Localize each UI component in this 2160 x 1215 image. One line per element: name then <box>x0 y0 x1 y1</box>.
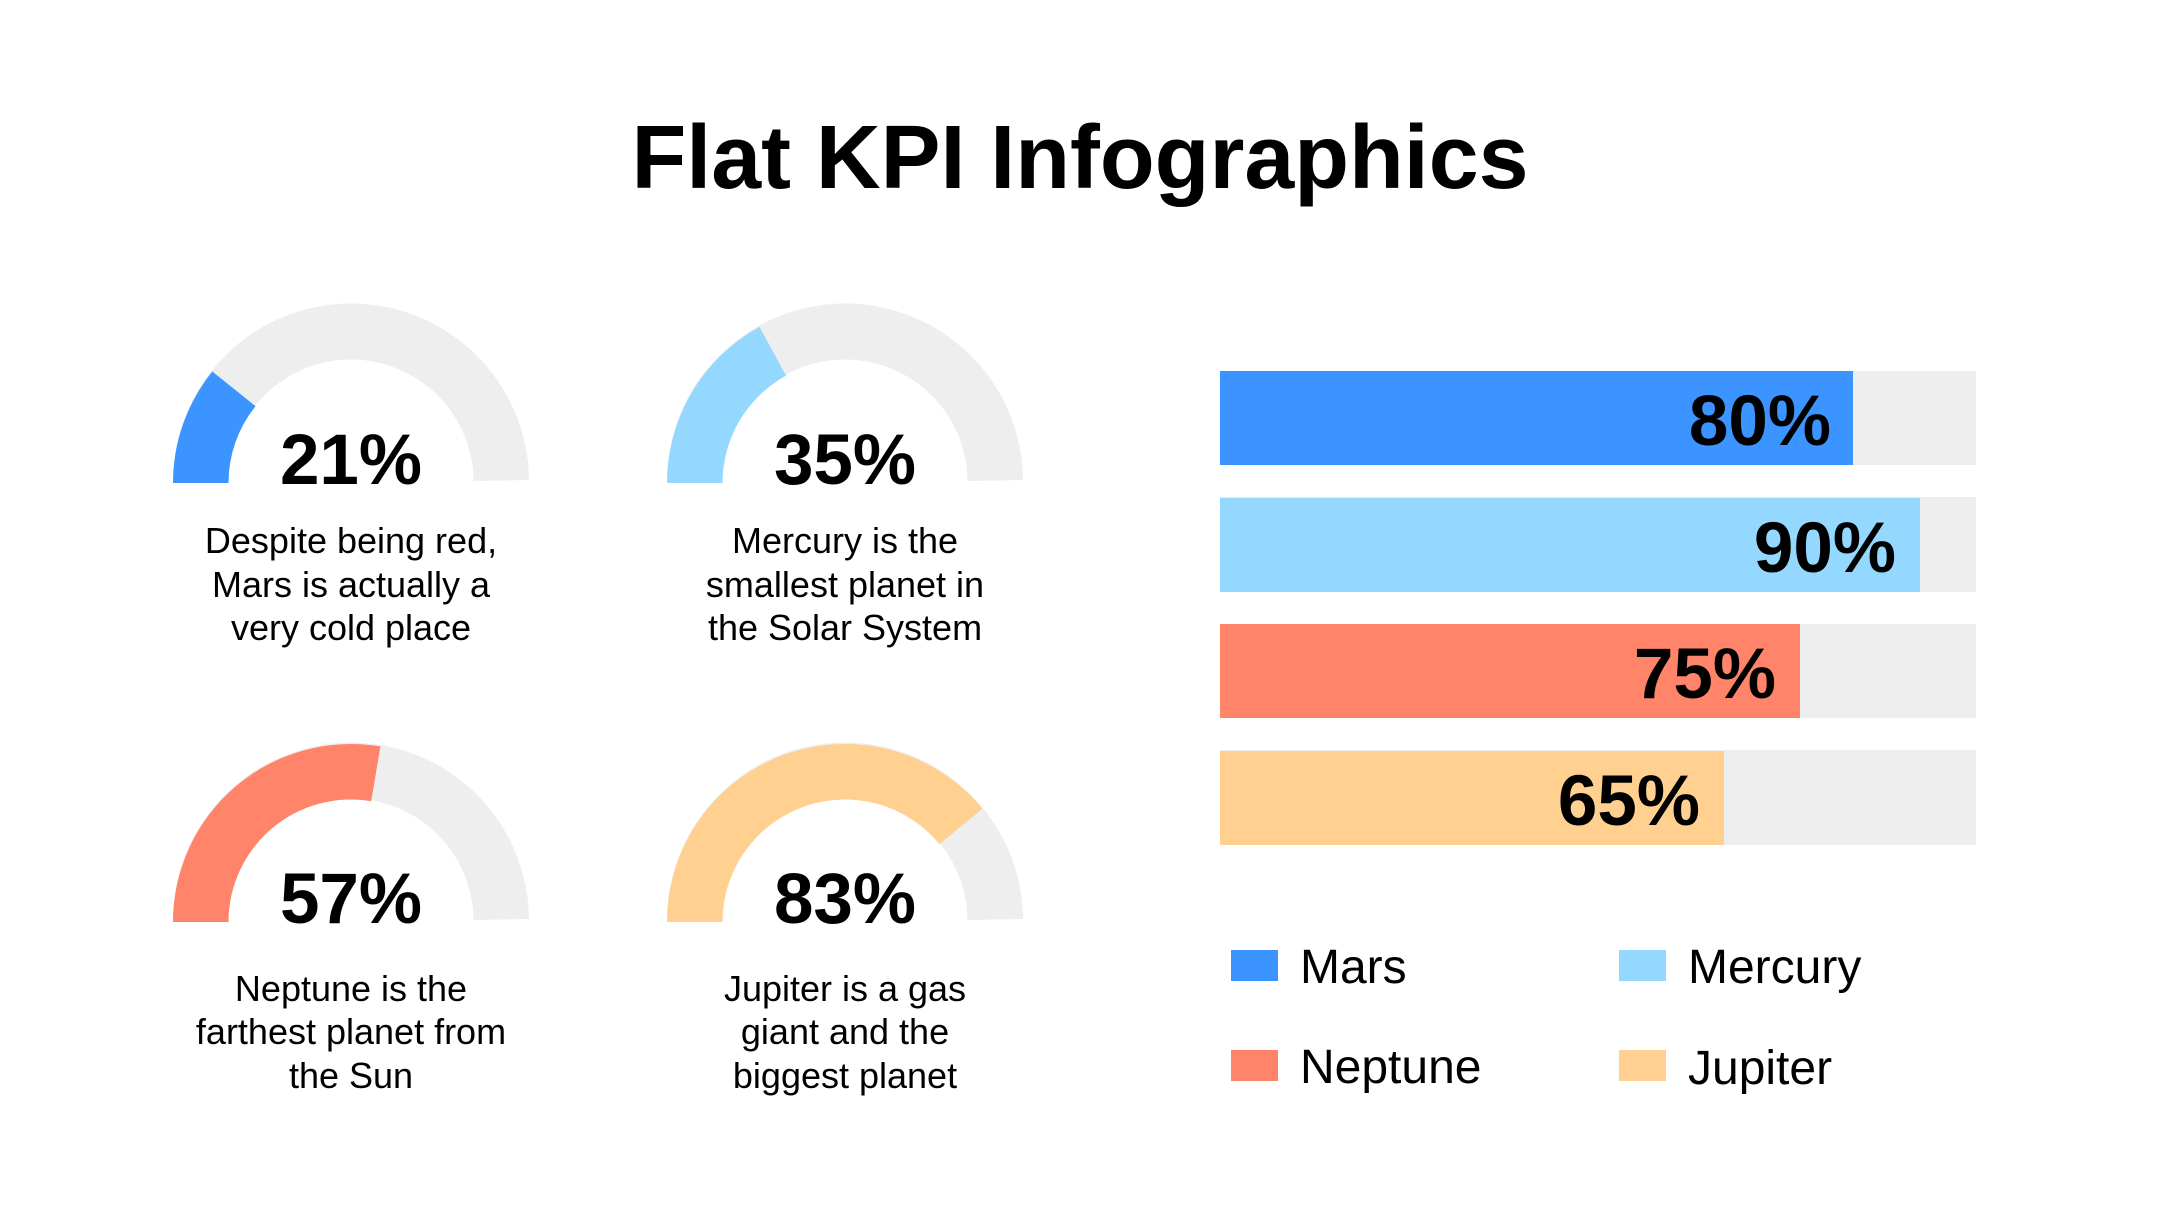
legend item: Mercury: Mercury <box>1688 941 1861 994</box>
bar: Mercury 90%: 90% <box>1754 509 1896 588</box>
bar: Neptune 75%: 75% <box>1634 635 1776 714</box>
bar: Neptune 75% <box>1220 624 1976 718</box>
value: 57%: 57% <box>280 860 422 939</box>
gauge track: Jupiter <box>667 742 1023 922</box>
bar: Jupiter 65%: 65% <box>1558 762 1700 841</box>
bar: Mercury 90% <box>1220 497 1976 592</box>
description: Neptune: the Sun <box>289 1055 413 1096</box>
description: Mercury: Mercury is the <box>732 520 958 561</box>
description: Mars: very cold place <box>231 607 471 648</box>
gauge fill: Jupiter <box>667 744 982 922</box>
bar chart <box>1220 371 1976 845</box>
legend item: Jupiter: Jupiter <box>1688 1042 1832 1095</box>
bar: Jupiter 65% <box>1220 750 1976 845</box>
gauge panel: Mars 21% <box>173 303 529 648</box>
value: 21%: 21% <box>280 421 422 500</box>
legend item: Neptune: Neptune <box>1300 1041 1481 1094</box>
gauge track: Mercury <box>667 303 1023 483</box>
description: Neptune: farthest planet from <box>196 1011 506 1052</box>
gauge track: Mars <box>173 303 529 483</box>
legend item: Mars <box>1231 941 1407 994</box>
legend <box>1231 941 1861 1095</box>
gauge fill: Mercury <box>667 327 786 483</box>
description: Jupiter: Jupiter is a gas <box>724 968 966 1009</box>
description: Mercury: smallest planet in <box>706 564 984 605</box>
description: Mars: Mars is actually a <box>212 564 491 605</box>
value: 35%: 35% <box>774 421 916 500</box>
bar: Mars 80% <box>1220 371 1976 465</box>
description: Neptune: Neptune is the <box>235 968 467 1009</box>
value: 83%: 83% <box>774 860 916 939</box>
description: Jupiter: biggest planet <box>733 1055 957 1096</box>
gauge fill: Neptune <box>173 744 380 922</box>
gauge track: Neptune <box>173 742 529 922</box>
title: Flat KPI Infographics <box>632 108 1528 208</box>
description: Jupiter: giant and the <box>741 1011 949 1052</box>
gauge panel: Neptune 57% <box>173 742 529 1096</box>
legend item: Jupiter <box>1619 1042 1832 1095</box>
gauge panel: Jupiter 83% <box>667 742 1023 1096</box>
bar: Mars 80%: 80% <box>1689 382 1831 461</box>
legend item: Mars: Mars <box>1300 941 1407 994</box>
gauge panel: Mercury 35% <box>667 303 1023 648</box>
description: Mars: Despite being red, <box>205 520 497 561</box>
description: Mercury: the Solar System <box>708 607 982 648</box>
gauge fill: Mars <box>173 372 256 483</box>
